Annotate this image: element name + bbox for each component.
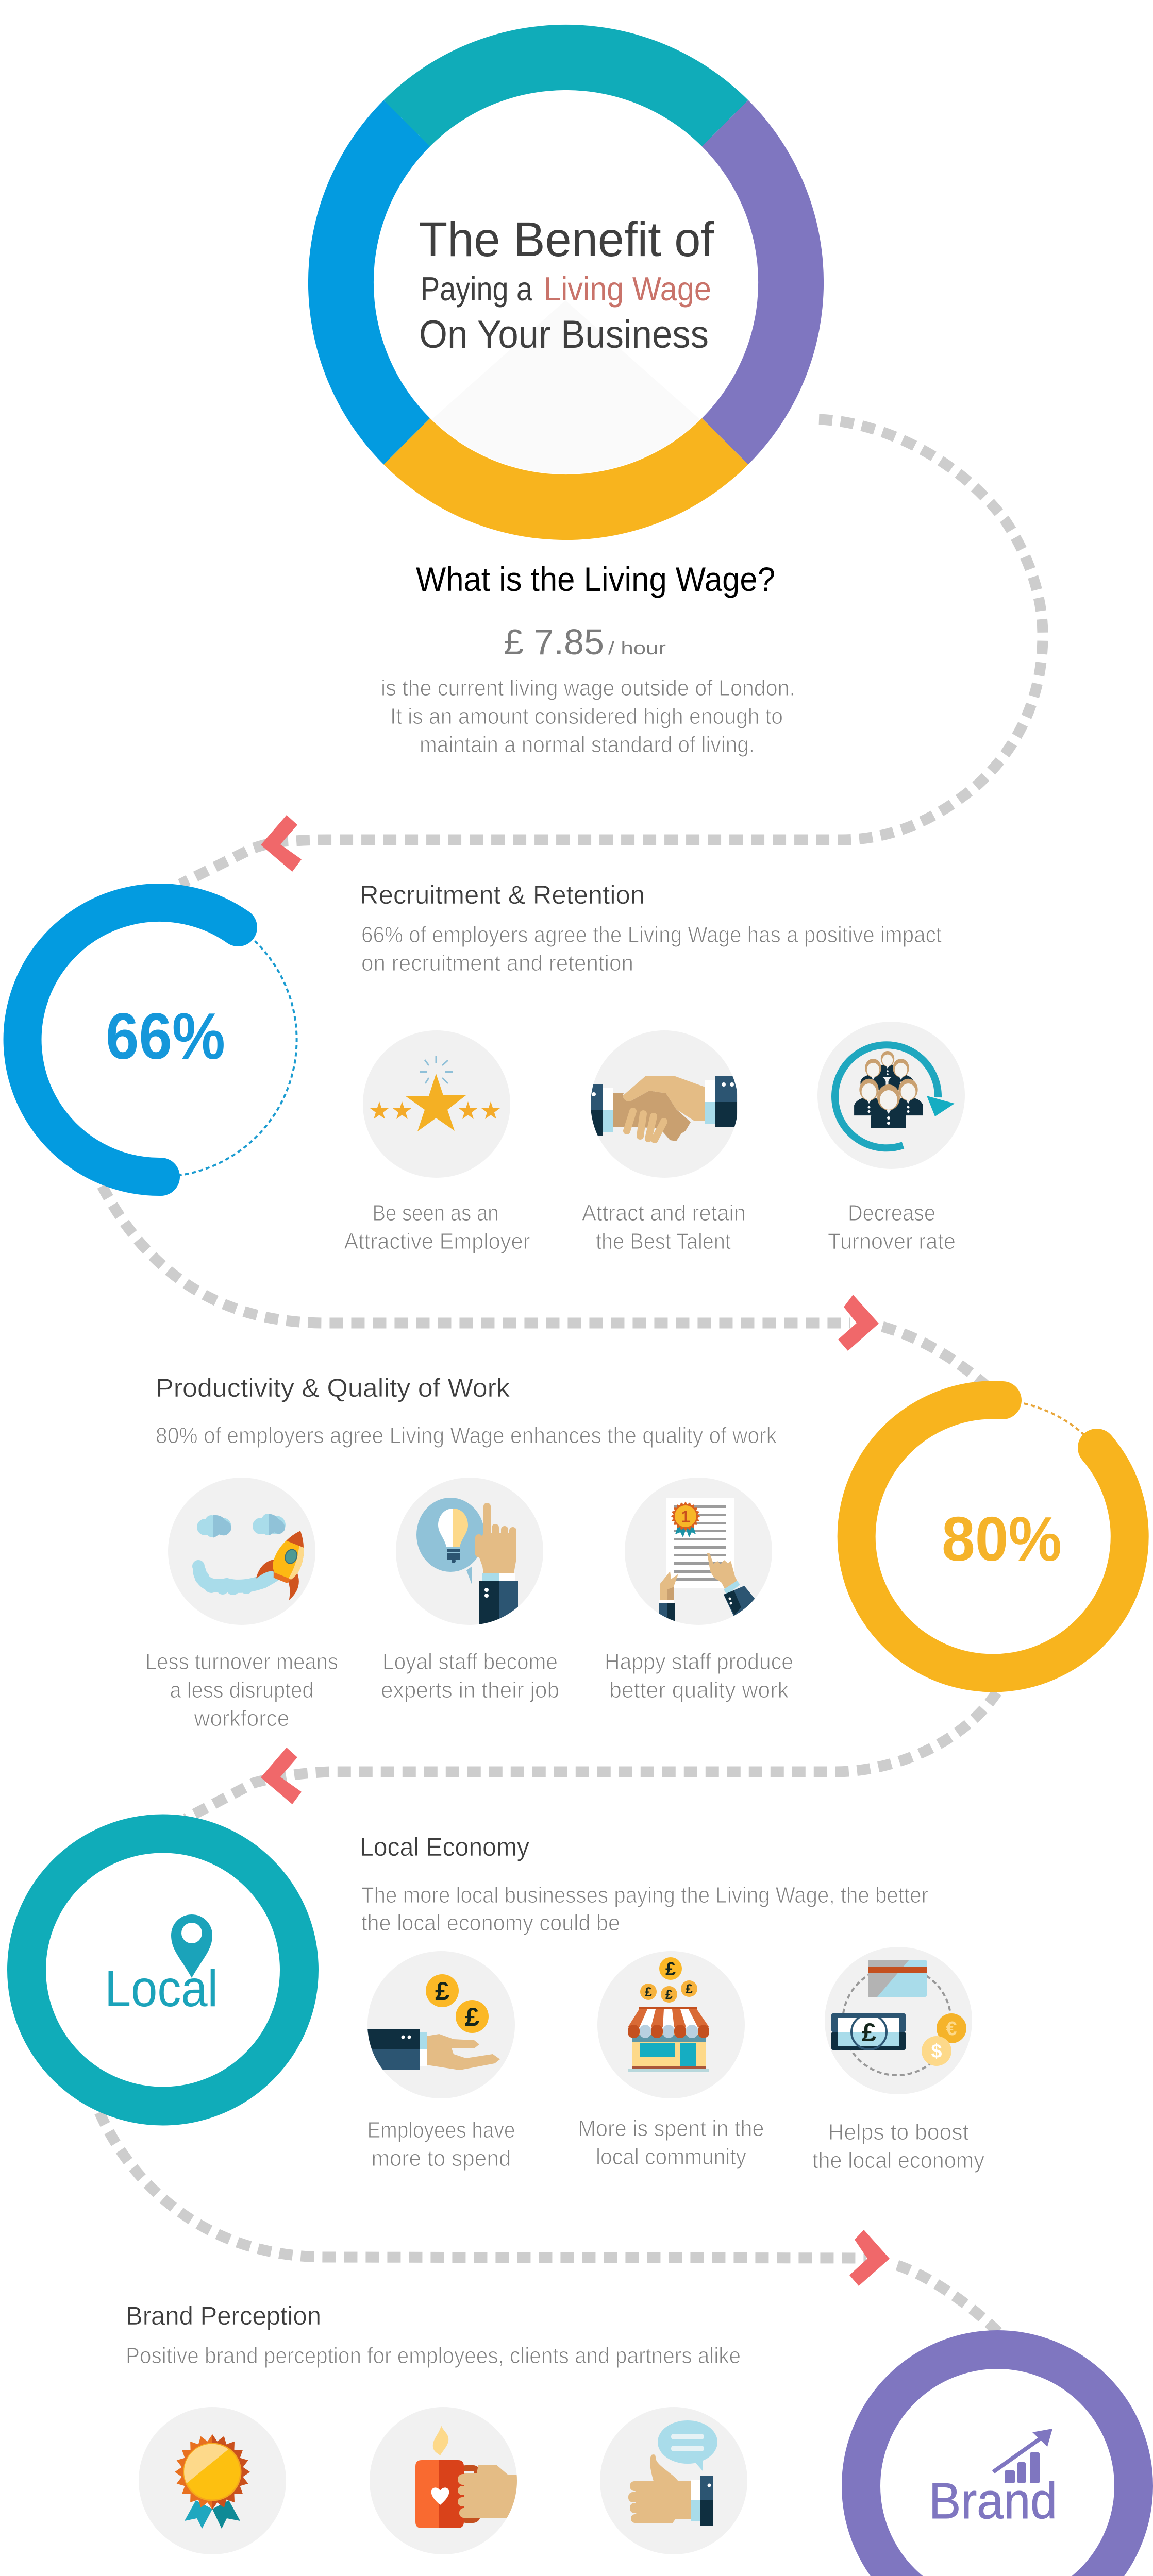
icon: handshake — [589, 1030, 738, 1178]
icon: certificate with medal — [625, 1478, 772, 1626]
arrow: red chevron 1 — [261, 815, 302, 872]
label: attractive employer: Attractive Employer — [344, 1229, 530, 1254]
label: better quality work — [605, 1649, 793, 1703]
label: best talent: Attract and retain — [582, 1200, 746, 1226]
label: turnover rate: Turnover rate — [828, 1229, 956, 1254]
icon: hand with coins: £ — [435, 1977, 449, 2006]
label: local community: More is spent in the — [578, 2116, 764, 2141]
label: attractive employer: Be seen as an — [372, 1200, 499, 1226]
title: Paying a — [421, 270, 533, 308]
title: On Your Business — [419, 313, 709, 357]
icon: hand with coins — [361, 1951, 515, 2098]
label: turnover rate — [828, 1200, 956, 1254]
icon: lightbulb and pointing hand — [396, 1478, 543, 1627]
icon: thumbs up with speech bubble — [600, 2407, 747, 2554]
arrow: red chevron 3 — [261, 1748, 302, 1804]
text: recruitment summary — [361, 922, 942, 976]
text: brand summary: Positive brand perception for employees, clients and partners alike — [126, 2343, 741, 2368]
icon: shop with coins: £ — [665, 1958, 676, 1979]
panel: 80 percent ring — [857, 1400, 1130, 1673]
dashed connector path: recruitment to productivity — [102, 1186, 992, 1391]
text: local economy summary: the local economy could be — [361, 1910, 620, 1936]
intro text: maintain a normal standard of living. — [420, 732, 755, 757]
icon: stars — [363, 1030, 510, 1178]
intro text — [381, 675, 795, 757]
panel: local ring: Local — [105, 1960, 218, 2018]
intro text: It is an amount considered high enough to — [390, 704, 783, 729]
title: Living Wage — [544, 270, 711, 308]
icon: caring mug — [370, 2407, 518, 2554]
label: less disrupted workforce: workforce — [194, 1706, 290, 1731]
icon: shop with coins — [597, 1951, 745, 2098]
label: experts in their job: Loyal staff become — [382, 1649, 558, 1674]
label: more to spend: Employees have — [367, 2117, 515, 2143]
icon: rocket — [168, 1478, 318, 1625]
heading: brand perception: Brand Perception — [126, 2301, 321, 2330]
icon: certificate with medal: 1 — [681, 1507, 690, 1526]
icon: shop with coins: £ — [665, 1988, 673, 2002]
text: productivity summary: 80% of employers agree Living Wage enhances the quality of work — [156, 1423, 777, 1448]
label: local community: local community — [596, 2144, 746, 2170]
panel: 80 percent ring: 80% — [942, 1504, 1062, 1574]
title — [419, 212, 714, 357]
label: attractive employer — [344, 1200, 530, 1254]
dashed connector path: intro to recruitment — [180, 419, 1043, 884]
heading: what is the living wage: What is the Living Wage? — [416, 560, 775, 598]
icon: accreditation medal — [139, 2407, 286, 2554]
label: experts in their job — [381, 1649, 559, 1703]
label: better quality work: better quality work — [609, 1677, 789, 1703]
intro text: is the current living wage outside of London. — [381, 675, 795, 701]
text: recruitment summary: 66% of employers agree the Living Wage has a positive impact — [361, 922, 942, 947]
label: boost the local economy: the local economy — [812, 2148, 984, 2173]
icon: turnover team — [817, 1022, 965, 1169]
dashed connector path: productivity to local economy — [186, 1692, 997, 1819]
arrow: red chevron 2 — [838, 1295, 879, 1351]
icon: money and card cycle — [825, 1947, 972, 2094]
label: less disrupted workforce — [145, 1649, 338, 1731]
arrow: red chevron 4 — [849, 2230, 890, 2286]
panel: local ring — [27, 1834, 299, 2106]
wage figure: £ 7.85 — [504, 622, 604, 662]
label: less disrupted workforce: Less turnover means — [145, 1649, 338, 1674]
label: best talent: the Best Talent — [596, 1229, 731, 1254]
icon: money and card cycle: € — [946, 2018, 957, 2040]
label: experts in their job: experts in their job — [381, 1677, 559, 1703]
icon: money and card cycle: £ — [862, 2018, 876, 2047]
label: best talent — [582, 1200, 746, 1254]
heading: productivity and quality of work: Productivity & Quality of Work — [156, 1374, 510, 1402]
wage figure: / hour — [608, 637, 666, 658]
text: recruitment summary: on recruitment and retention — [361, 951, 633, 976]
text: local economy summary — [361, 1883, 928, 1936]
heading: local economy: Local Economy — [360, 1833, 529, 1861]
label: boost the local economy: Helps to boost — [828, 2120, 969, 2145]
heading: recruitment and retention: Recruitment & Retention — [360, 880, 645, 909]
label: more to spend: more to spend — [371, 2146, 511, 2171]
label: better quality work: Happy staff produce — [605, 1649, 793, 1674]
label: more to spend — [367, 2117, 515, 2171]
title ring — [308, 25, 824, 540]
panel: 66 percent ring — [23, 903, 297, 1177]
label: less disrupted workforce: a less disrupted — [170, 1677, 313, 1703]
icon: shop with coins: £ — [686, 1982, 693, 1996]
icon: money and card cycle: $ — [931, 2041, 942, 2062]
text: local economy summary: The more local businesses paying the Living Wage, the better — [361, 1883, 928, 1908]
panel: 66 percent ring: 66% — [106, 999, 225, 1073]
icon: shop with coins: £ — [645, 1985, 652, 1999]
title: The Benefit of — [419, 212, 714, 267]
panel: brand ring: Brand — [929, 2472, 1057, 2529]
label: local community — [578, 2116, 764, 2170]
icon: hand with coins: £ — [465, 2003, 479, 2031]
wage figure — [504, 622, 666, 662]
panel: brand ring — [861, 2349, 1134, 2576]
dashed connector path: local economy to brand — [99, 2112, 1000, 2334]
label: turnover rate: Decrease — [848, 1200, 935, 1226]
label: boost the local economy — [812, 2120, 984, 2173]
